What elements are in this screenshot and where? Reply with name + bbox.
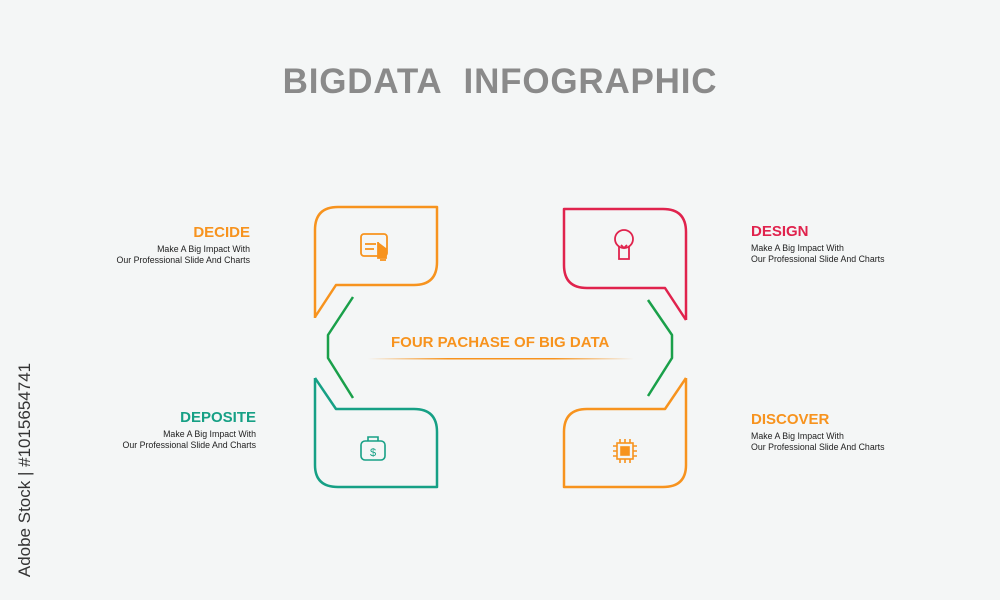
text: discover [751, 411, 884, 452]
text: design: Our Professional Slide And Charts [751, 254, 884, 264]
text: deposite: Make A Big Impact With [163, 429, 256, 439]
text: decide: Our Professional Slide And Charts [116, 255, 250, 265]
icon: briefcase dollar: $ [370, 447, 376, 459]
connector left [328, 297, 353, 398]
text: deposite [122, 409, 256, 450]
text: design: DESIGN [751, 223, 809, 240]
text: decide: Make A Big Impact With [157, 244, 250, 254]
text: design: Make A Big Impact With [751, 243, 844, 253]
text: discover: Our Professional Slide And Charts [751, 442, 884, 452]
text: deposite: DEPOSITE [180, 409, 256, 426]
text: discover: Make A Big Impact With [751, 431, 844, 441]
text: deposite: Our Professional Slide And Charts [122, 440, 256, 450]
connector right [648, 300, 672, 396]
box: deposite [315, 378, 437, 487]
icon: briefcase dollar [361, 437, 385, 460]
text: decide [116, 224, 250, 265]
box: design [564, 209, 686, 320]
center heading: FOUR PACHASE OF BIG DATA [391, 334, 609, 351]
box: decide [315, 207, 437, 318]
watermark id: Adobe Stock | #1015654741 [15, 363, 34, 577]
text: design [751, 223, 884, 264]
icon: decide touch screen [361, 234, 387, 260]
icon: bulb [615, 230, 633, 259]
text: discover: DISCOVER [751, 411, 829, 428]
box: discover [564, 378, 686, 487]
text: decide: DECIDE [193, 224, 250, 241]
center line [368, 358, 634, 360]
icon: chip [613, 439, 637, 463]
title: BIGDATA INFOGRAPHIC [283, 62, 717, 101]
